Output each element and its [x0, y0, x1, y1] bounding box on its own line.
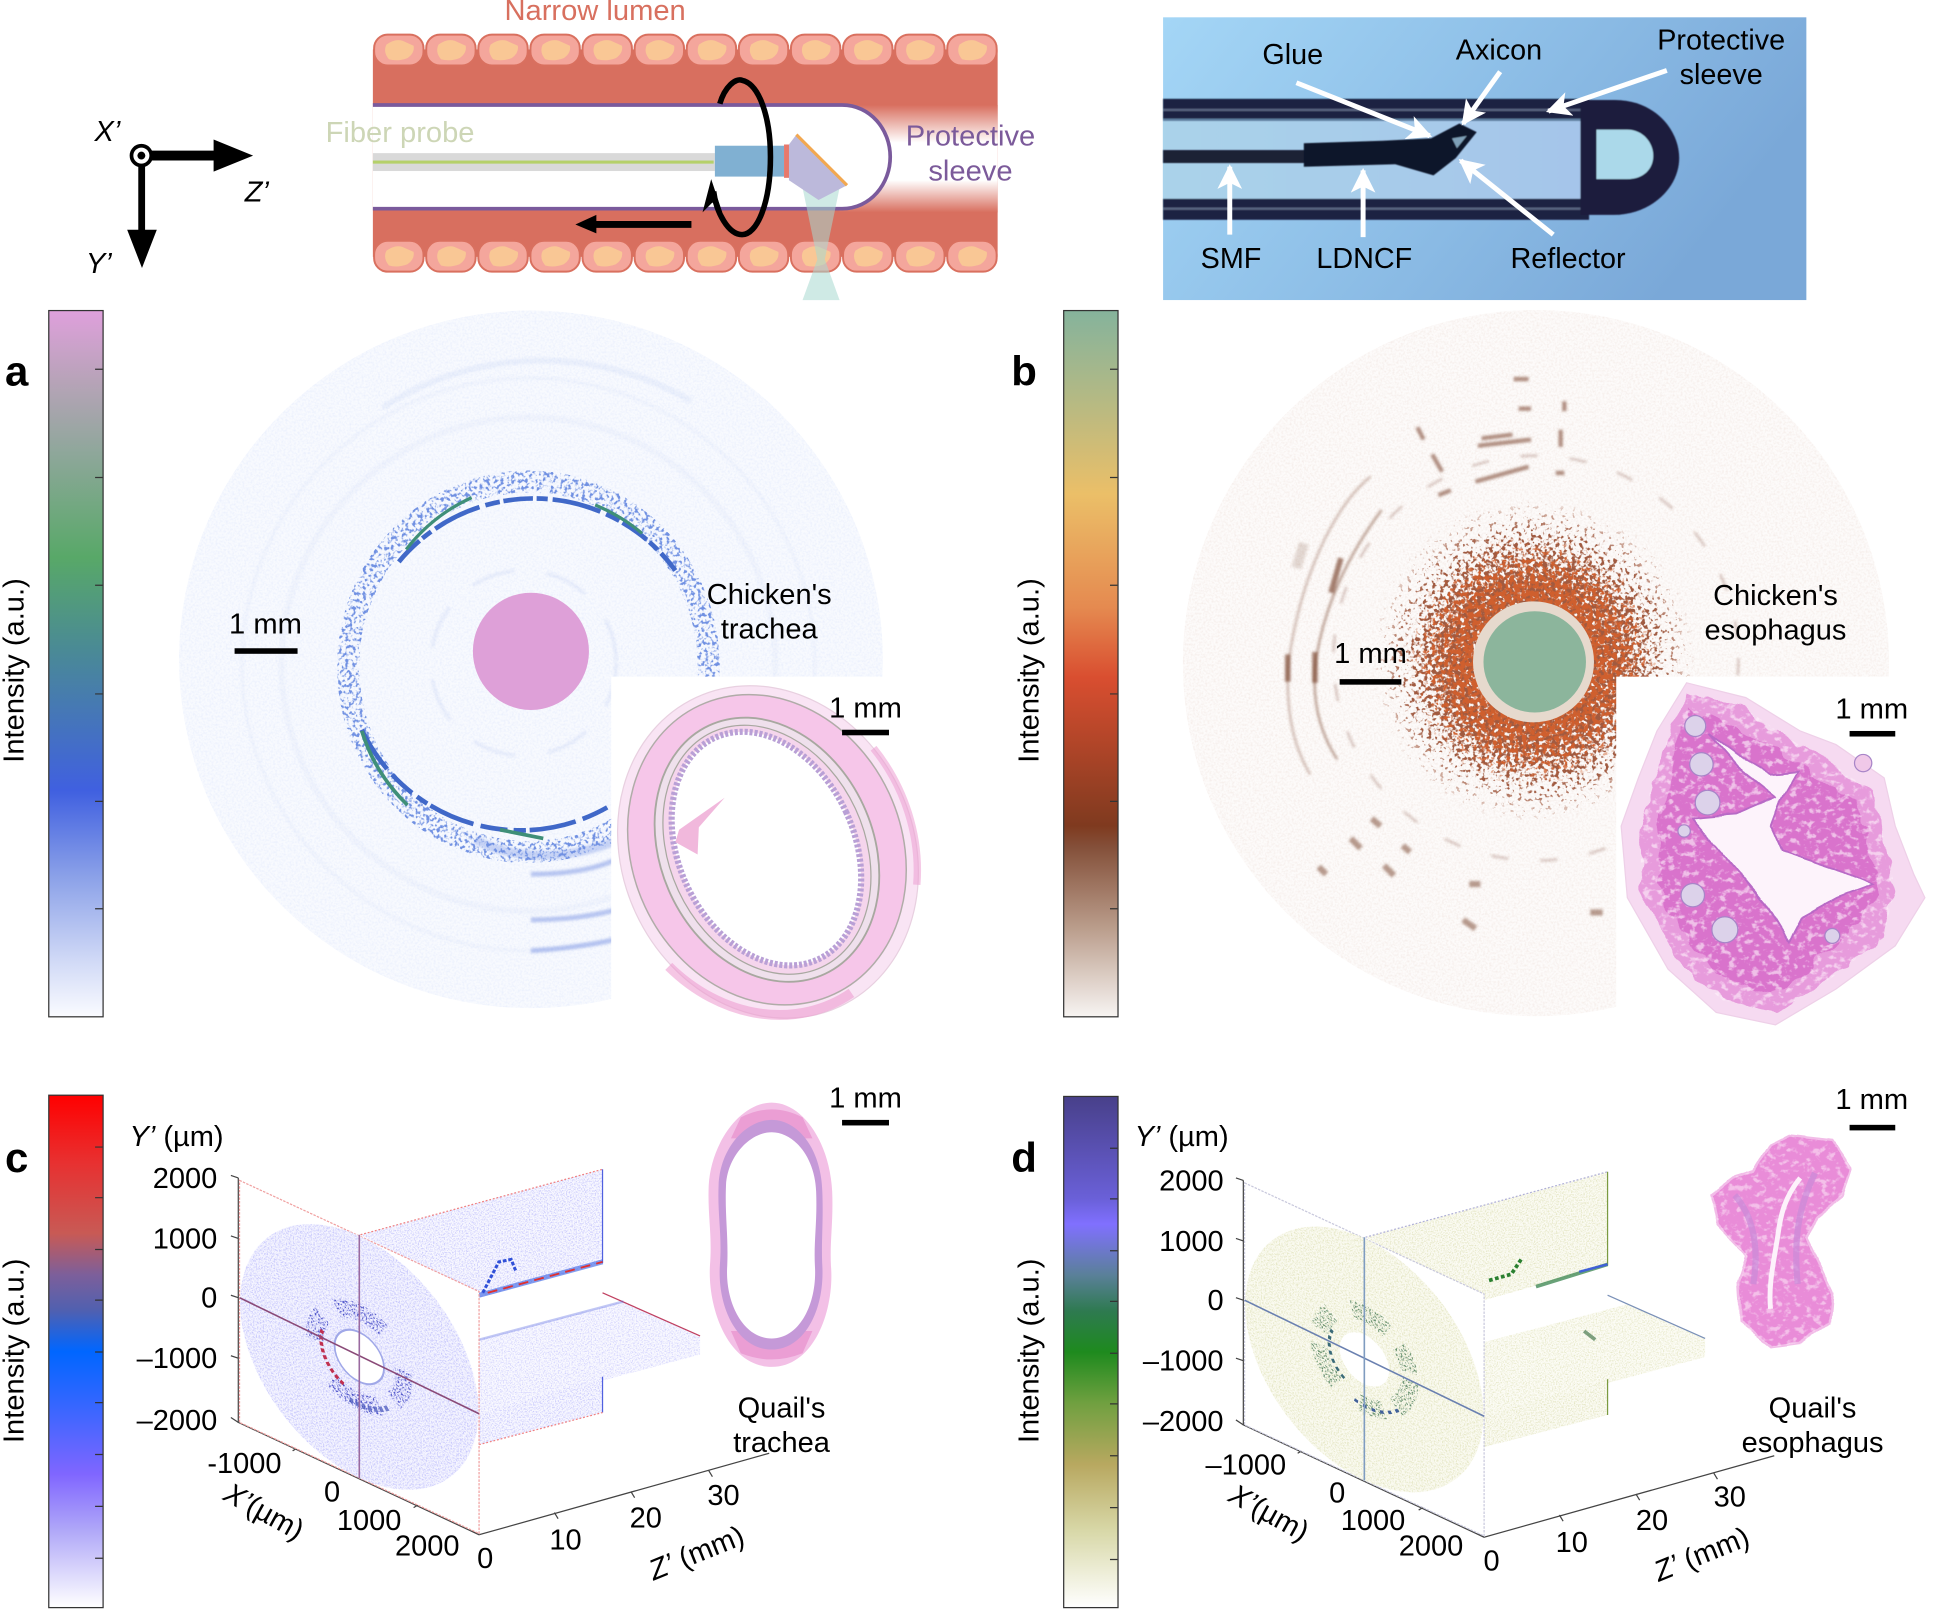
inset scale bar a: 1 mm [829, 692, 902, 724]
rotation arrow [703, 80, 770, 235]
panel letter d: d [1011, 1134, 1037, 1181]
y axis title: Y’ (µm) [130, 1121, 224, 1153]
panel letter c: c [5, 1134, 28, 1181]
label: chicken's esophagus [1705, 580, 1846, 647]
arcs and streaks [1288, 379, 1738, 929]
light beam [803, 188, 840, 300]
y tick labels: –1000 [137, 1343, 217, 1375]
top cell row [374, 35, 997, 65]
centre disc [1473, 601, 1594, 722]
x tick labels: 2000 [1399, 1531, 1463, 1563]
x tick labels: 2000 [395, 1531, 459, 1563]
white arrows [1230, 70, 1667, 237]
coordinate axes [86, 116, 269, 280]
label: fiber probe: Fiber probe [326, 117, 475, 149]
y tick labels: 0 [201, 1283, 217, 1315]
centre disc [473, 593, 589, 710]
label: chicken's esophagus: Chicken's [1713, 580, 1838, 612]
x axis title: X’(µm) [217, 1477, 309, 1547]
colour bar c [49, 1095, 103, 1608]
axes [231, 1175, 769, 1535]
speckled ring [348, 482, 709, 852]
inset: quail esophagus histology [1710, 1136, 1851, 1347]
panel a [0, 311, 972, 1068]
prism reflector [789, 135, 847, 200]
pullback arrow [575, 215, 691, 233]
z tick labels: 0 [1483, 1546, 1500, 1578]
bright tissue arcs [362, 498, 675, 838]
axis label: intensity: Intensity (a.u.) [1013, 578, 1045, 763]
faint outer rings [242, 361, 815, 951]
front disc [1245, 1184, 1483, 1535]
y tick labels: 2000 [153, 1163, 217, 1195]
colour bar d [1064, 1096, 1118, 1608]
schematic: probe in narrow lumen [326, 0, 1035, 300]
axes [1236, 1178, 1774, 1537]
floor slice [479, 1293, 700, 1414]
scale bar b [1334, 638, 1407, 685]
y tick labels: 1000 [153, 1223, 217, 1255]
front plane frame [240, 1180, 479, 1534]
label: protective sleeve: sleeve [928, 155, 1013, 187]
upper slice [1366, 1172, 1608, 1300]
label: chicken's trachea [707, 579, 832, 645]
coordinate axes: X’ [94, 116, 121, 148]
coordinate axes: Z’ [244, 176, 269, 208]
photo labels [1201, 24, 1785, 275]
inset: chicken esophagus histology [1616, 677, 1936, 1031]
panel b [1011, 310, 1936, 1031]
fiber [373, 144, 790, 178]
photo labels: Axicon [1456, 34, 1542, 66]
z tick labels: 10 [549, 1525, 582, 1557]
z axis title: Z’ (mm) [643, 1520, 749, 1587]
label: chicken's esophagus: esophagus [1705, 615, 1846, 647]
photo labels: Reflector [1511, 243, 1626, 275]
x tick labels: 1000 [1341, 1505, 1405, 1537]
photo: probe micrograph [1163, 17, 1806, 300]
z tick labels [477, 1480, 740, 1575]
front plane frame [1245, 1183, 1484, 1536]
upper slice [361, 1169, 603, 1298]
inset scale bar d: 1 mm [1835, 1084, 1908, 1116]
inset scale bar d [1835, 1084, 1908, 1130]
inset: quail trachea histology [709, 1103, 832, 1367]
esophagus lumen [1693, 733, 1872, 941]
speckled scatter halo [1371, 498, 1696, 824]
panel letter b: b [1011, 347, 1037, 394]
3D volume c [231, 1169, 769, 1535]
x tick labels [1205, 1449, 1463, 1563]
section lines [1245, 1237, 1484, 1480]
3D volume d [1236, 1172, 1774, 1537]
y tick labels [1143, 1165, 1224, 1438]
z tick labels: 0 [477, 1543, 493, 1575]
y tick labels: –1000 [1143, 1346, 1224, 1378]
x tick labels [207, 1448, 459, 1563]
photo labels: sleeve [1680, 59, 1763, 91]
inset: chicken trachea histology [564, 636, 972, 1068]
polar image: chicken trachea [179, 311, 883, 1008]
x axis title: X’(µm) [1222, 1478, 1314, 1548]
axis label: intensity: Intensity (a.u.) [1013, 1259, 1045, 1443]
x tick labels: -1000 [207, 1448, 282, 1480]
photo labels: LDNCF [1316, 243, 1412, 275]
z tick labels: 30 [1714, 1481, 1746, 1513]
label: quail's esophagus [1742, 1392, 1883, 1459]
z tick labels: 20 [1636, 1505, 1668, 1537]
fiber and axicon [1163, 124, 1477, 175]
y tick labels: –2000 [1143, 1406, 1224, 1438]
floor slice [1484, 1295, 1705, 1416]
coordinate axes: Y’ [86, 248, 112, 280]
y axis title: Y’ (µm) [1135, 1121, 1229, 1153]
photo labels: Protective [1657, 24, 1785, 56]
section lines [240, 1235, 479, 1478]
z tick labels: 10 [1556, 1527, 1588, 1559]
label: chicken's trachea: Chicken's [707, 579, 832, 611]
z tick labels: 30 [707, 1480, 740, 1512]
tube walls [1163, 99, 1679, 220]
label: protective sleeve [906, 121, 1035, 187]
bottom cell row [374, 241, 997, 272]
scale bar b: 1 mm [1334, 638, 1407, 670]
colour bar b [1064, 311, 1118, 1017]
label: quail's trachea: trachea [733, 1427, 831, 1459]
z tick labels: 20 [630, 1502, 662, 1534]
colour bar a [49, 311, 103, 1017]
y tick labels: –2000 [137, 1405, 217, 1437]
y tick labels: 2000 [1159, 1165, 1224, 1197]
polar image: chicken esophagus [1183, 310, 1889, 1016]
scale bar a: 1 mm [229, 608, 302, 640]
photo labels: Glue [1262, 39, 1323, 71]
front disc [240, 1181, 478, 1533]
label: quail's esophagus: esophagus [1742, 1427, 1883, 1459]
z tick labels [1483, 1481, 1746, 1578]
lower slice [479, 1377, 603, 1445]
label: quail's esophagus: Quail's [1769, 1392, 1856, 1424]
lower slice [1484, 1379, 1608, 1447]
inset scale bar b: 1 mm [1835, 694, 1908, 726]
label: protective sleeve: Protective [906, 121, 1035, 153]
x tick labels: 0 [324, 1476, 340, 1508]
panel d [1011, 1084, 1908, 1608]
protective sleeve outline [373, 105, 890, 209]
x tick labels: 0 [1329, 1478, 1345, 1510]
y tick labels: 1000 [1159, 1226, 1224, 1258]
label: quail's trachea [733, 1392, 831, 1459]
submucosal glands [1678, 716, 1872, 943]
label: chicken's trachea: trachea [721, 613, 818, 645]
y tick labels: 0 [1207, 1285, 1224, 1317]
photo labels: SMF [1201, 243, 1261, 275]
z axis title: Z’ (mm) [1649, 1521, 1754, 1589]
inset scale bar c: 1 mm [829, 1083, 902, 1115]
x tick labels: –1000 [1205, 1449, 1286, 1481]
panel letter a: a [5, 347, 29, 394]
y tick labels [137, 1163, 217, 1437]
x tick labels: 1000 [337, 1505, 401, 1537]
label: quail's trachea: Quail's [738, 1392, 825, 1424]
panel c [0, 1083, 902, 1608]
